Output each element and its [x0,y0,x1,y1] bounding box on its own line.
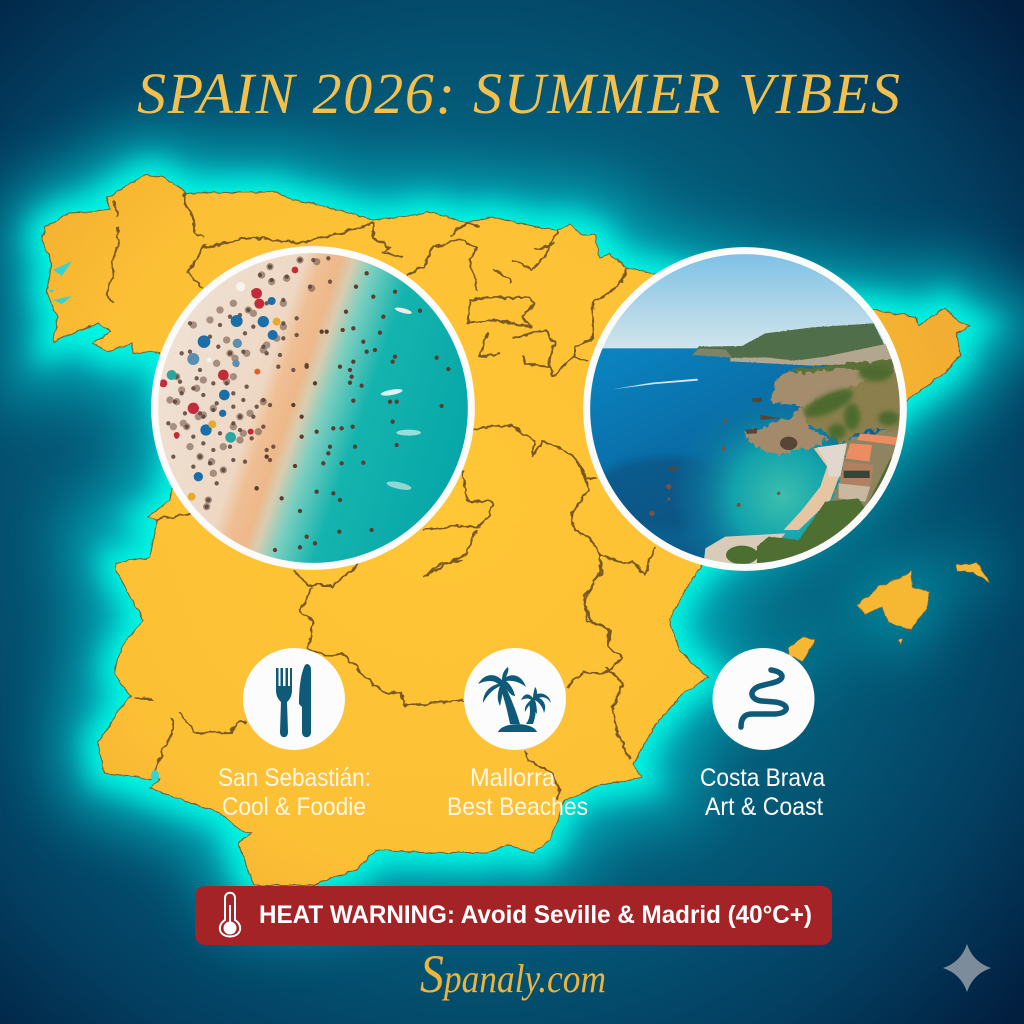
title: SPAIN 2026: SUMMER VIBES [137,61,900,126]
labels: Costa Brava [700,764,825,792]
icon: fork and knife [243,648,345,750]
boat wake [612,379,698,389]
labels: San Sebastián: [218,764,371,792]
sea [585,348,905,568]
sky [602,254,886,348]
labels [218,764,371,821]
foreground greenery and pier [704,533,785,563]
mainland [42,175,970,885]
lagoon [151,770,159,782]
labels [700,764,825,821]
labels: Art & Coast [705,793,823,821]
icon: thermometer [220,893,240,936]
glow around map [42,175,990,885]
rias [48,261,72,304]
photo: coastal bay and cliffs [585,250,905,607]
website: Spanaly.com [420,944,606,1004]
heat warning banner [195,886,832,945]
dark rocks [669,397,797,471]
stop: Mallorra [447,648,588,821]
labels: Cool & Foodie [222,793,366,821]
beach [784,443,845,530]
cliffs and rocks [744,359,900,508]
far headland [692,323,892,366]
map of Spain [42,175,990,885]
labels: Mallorra [470,764,555,792]
photo: crowded beach aerial [150,247,477,573]
beach-goers [168,258,448,550]
region borders [107,193,655,800]
labels [447,764,588,821]
buildings [839,483,870,502]
stop: San Sebastián [218,648,371,821]
vegetation patches [801,365,899,440]
umbrellas [159,267,298,501]
stop: Costa Brava [700,648,825,821]
icon: sparkle star [943,944,991,992]
icon: winding coast [712,648,814,750]
small boats [649,419,780,516]
Balearic islands [788,563,990,662]
warning text: HEAT WARNING: Avoid Seville & Madrid (40°C+) [259,901,812,929]
icon: palm trees [464,648,566,750]
labels: Best Beaches [447,793,588,821]
paddle boards [380,306,421,492]
